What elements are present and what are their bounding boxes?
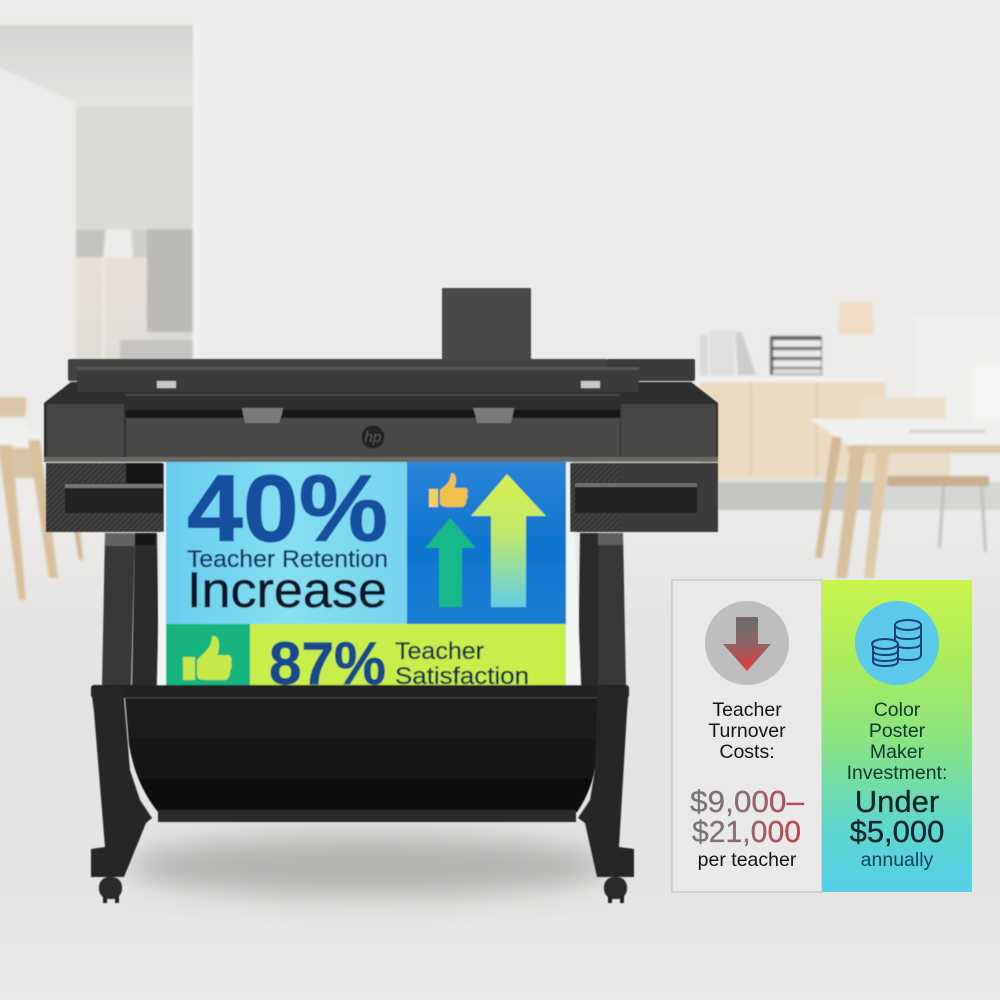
arrow: large up: [471, 474, 546, 607]
scanner back bar: [68, 359, 608, 381]
poster panel: 87 percent satisfaction: [250, 624, 566, 697]
investment label: Maker: [870, 741, 925, 763]
poster panel: thumbs icon: [166, 624, 250, 686]
casters: [99, 877, 627, 903]
arrow: small up: [425, 518, 476, 607]
turnover cost range: $9,000–: [690, 784, 805, 819]
turnover cost range: $21,000: [692, 814, 801, 849]
icon: gold thumbs up: [429, 473, 468, 507]
panel: poster maker investment: [822, 580, 972, 892]
printer main body: [44, 382, 718, 462]
printer stand legs: [102, 533, 626, 688]
scanner front bar: [77, 367, 639, 392]
paper bin: [91, 685, 634, 877]
paper clips: [242, 408, 514, 423]
comparison panel: [672, 580, 972, 892]
icon: down arrow: [705, 601, 789, 685]
poster panel: rising arrows: [407, 462, 566, 624]
poster panel: 40 percent retention: Teacher Retention: [187, 546, 388, 573]
turnover label: Teacher: [712, 699, 782, 721]
annually note: annually: [861, 849, 934, 871]
turnover cost range: [690, 784, 805, 849]
printer: [44, 288, 718, 903]
right bin frame: [578, 686, 634, 877]
poster panel: 87 percent satisfaction: Teacher: [395, 638, 484, 665]
icon: hp logo: hp: [365, 429, 381, 446]
icon: coin stacks: [855, 601, 939, 685]
investment label: Poster: [869, 720, 926, 742]
per teacher note: per teacher: [698, 849, 797, 871]
poster panel: 87 percent satisfaction: 87%: [269, 630, 386, 697]
poster panel: 87 percent satisfaction: Satisfaction: [395, 663, 529, 690]
tablet support: [442, 288, 531, 360]
investment amount: $5,000: [850, 814, 944, 849]
turnover label: Turnover: [708, 720, 786, 742]
floor shadow: [128, 836, 608, 896]
poster panel: 40 percent retention: 40%: [187, 456, 388, 562]
panel: turnover costs: [672, 580, 822, 892]
poster panel: 40 percent retention: [166, 456, 407, 624]
investment amount: Under: [855, 784, 939, 819]
investment label: Investment:: [847, 762, 947, 784]
poster paper: [157, 456, 581, 697]
poster panel: 40 percent retention: Increase: [187, 562, 387, 618]
left bin frame: [91, 686, 152, 877]
icon: hp logo: [362, 426, 384, 448]
scanner right cover: [607, 359, 695, 381]
turnover label: Costs:: [719, 741, 775, 763]
printer lower body: [46, 463, 718, 532]
investment label: Color: [874, 699, 921, 721]
